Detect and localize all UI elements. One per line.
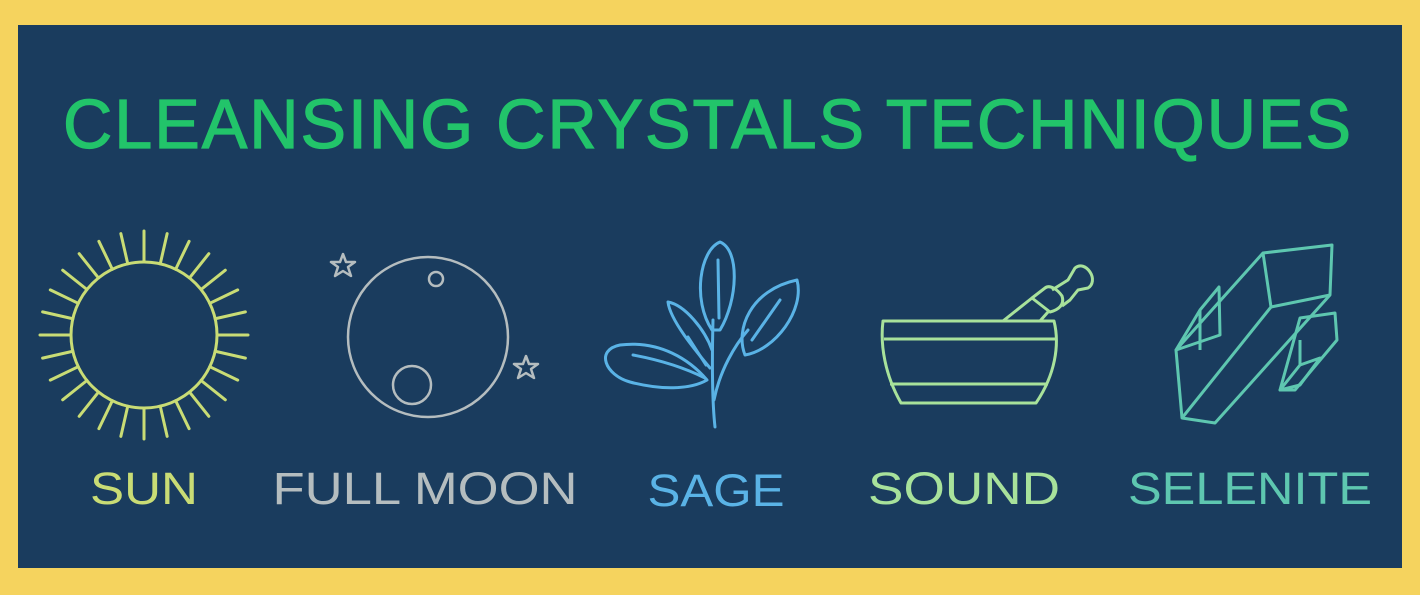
label: full moon: FULL MOON <box>272 463 578 514</box>
icon: sage <box>606 242 798 427</box>
label: sun: SUN <box>90 463 198 514</box>
icon: sound bowl <box>882 266 1092 403</box>
label: sage: SAGE <box>648 465 784 516</box>
label: sound: SOUND <box>868 463 1060 514</box>
label: selenite: SELENITE <box>1128 463 1372 514</box>
icon: full moon <box>331 254 538 417</box>
icon: selenite crystals <box>1176 245 1337 423</box>
icon: sun <box>40 231 248 439</box>
title: CLEANSING CRYSTALS TECHNIQUES <box>63 85 1353 163</box>
